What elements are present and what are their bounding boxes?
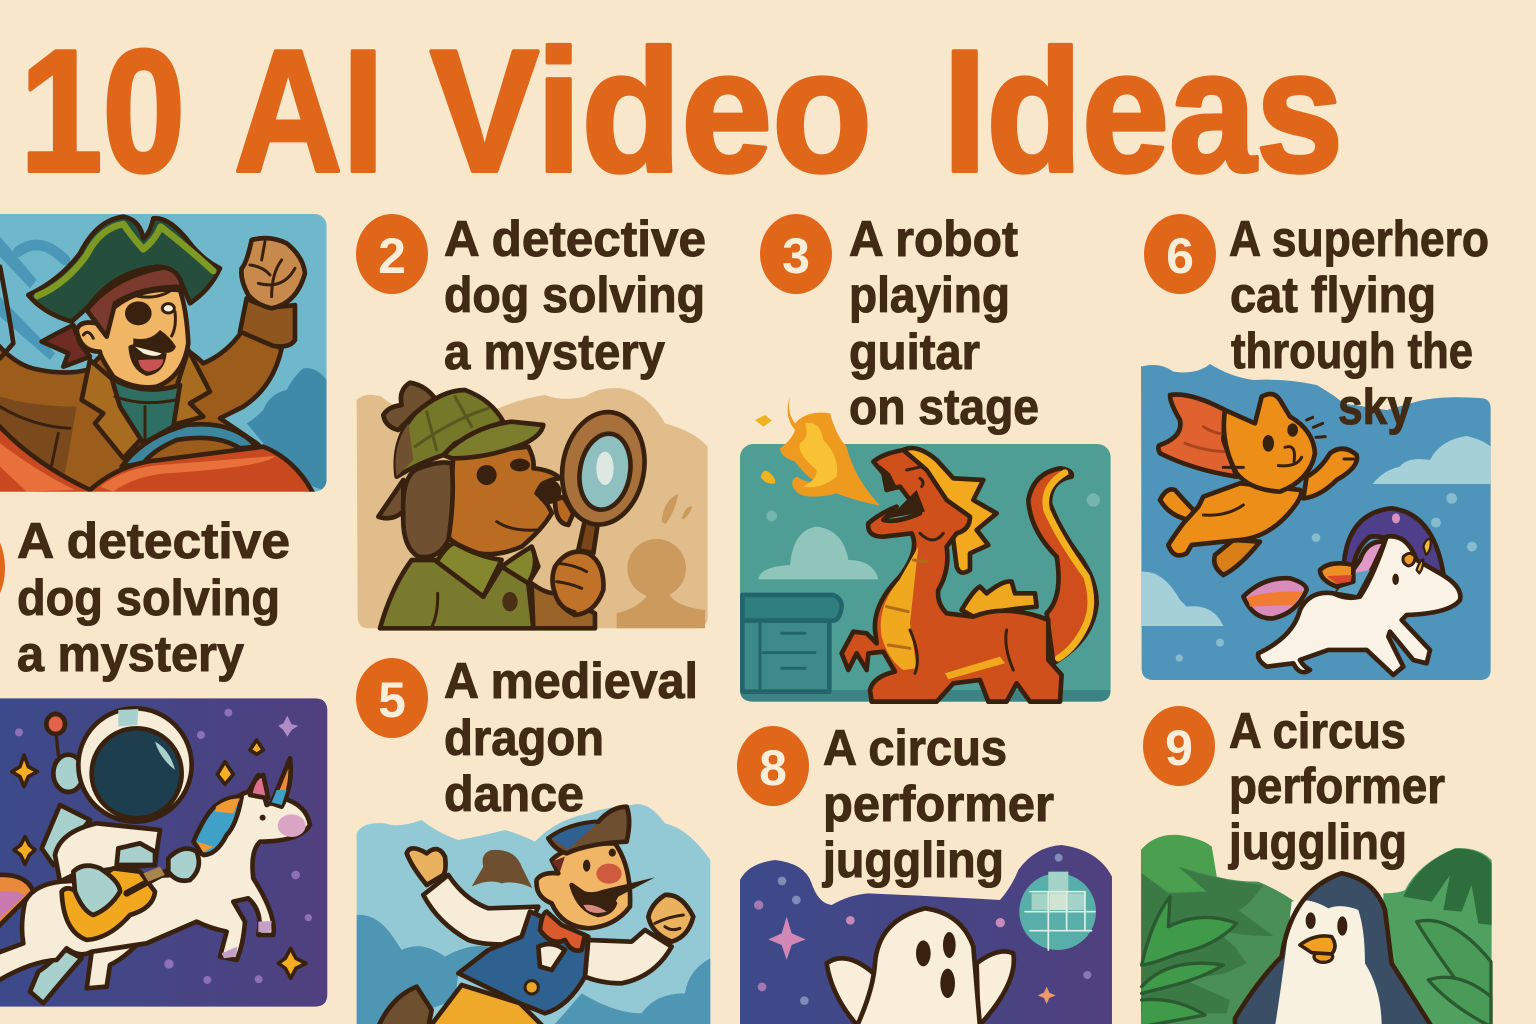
icon: red car — [0, 423, 315, 497]
panel: astronaut on unicorn — [0, 698, 327, 1007]
icon: dragon body — [842, 450, 1062, 702]
card heading: idea 5: 5 — [378, 672, 406, 728]
icon: pirate hair — [42, 325, 90, 367]
icon: steering wheel — [122, 424, 257, 467]
icon: desk — [742, 620, 829, 692]
title: AI — [234, 13, 384, 208]
card heading: idea 3: A robot — [849, 211, 1018, 267]
icon: back spikes — [962, 581, 1037, 617]
icon: shoe and trousers — [378, 987, 432, 1024]
card heading: idea 8: A circus — [823, 720, 1007, 776]
icon: deerstalker hat — [383, 383, 435, 430]
card heading: idea 8: performer — [823, 776, 1054, 832]
title: Ideas — [943, 13, 1343, 208]
icon: unicorn mane — [193, 797, 242, 855]
panel: ghost — [740, 845, 1112, 1024]
icon: man head — [536, 843, 630, 928]
card heading: idea 5: A medieval — [444, 653, 698, 709]
card heading: detective dog (left): dog solving — [17, 570, 280, 626]
card heading: detective dog (left): a mystery — [17, 626, 244, 682]
icon: dragon tail — [1028, 468, 1097, 663]
card heading: idea 2 — [356, 211, 706, 380]
icon: red cape — [1158, 394, 1237, 477]
panel: detective dog — [357, 383, 708, 628]
card heading: idea 3: playing — [849, 267, 1010, 323]
icon: unicorn body — [0, 775, 310, 982]
card heading: idea 9: 9 — [1165, 720, 1193, 776]
card heading: idea 9: A circus — [1229, 703, 1406, 759]
card heading: idea 6 — [1144, 211, 1489, 435]
card heading: idea 3 — [760, 211, 1039, 435]
icon: disco ball — [1019, 872, 1096, 950]
card heading: idea 2: a mystery — [444, 324, 665, 380]
icon: left arm and hand — [423, 875, 538, 944]
icon: bow tie — [540, 912, 585, 951]
card heading: idea 9: performer — [1229, 758, 1445, 814]
card heading: idea 9: juggling — [1228, 814, 1407, 870]
card heading: detective dog (left): A detective — [17, 513, 290, 569]
card heading: idea 2: dog solving — [444, 267, 705, 323]
icon: open mouth — [128, 344, 167, 376]
icon: pirate hat — [28, 217, 220, 322]
title: Video — [430, 13, 872, 208]
icon: right arm and fist — [585, 930, 672, 983]
icon: jungle leaves — [1142, 897, 1237, 965]
panel: dragon — [740, 397, 1111, 702]
title: 10 — [20, 13, 185, 208]
icon: floating hair piece — [472, 850, 532, 888]
card heading: idea 2: A detective — [444, 211, 706, 267]
card heading: idea 5: dragon — [444, 710, 604, 766]
icon: magnifying glass — [578, 520, 598, 553]
icon: dragon mane — [903, 448, 997, 573]
card heading: idea 8: 8 — [759, 740, 787, 796]
card heading: idea 9 — [1143, 703, 1445, 870]
icon: penguin — [1235, 873, 1432, 1024]
title — [20, 13, 1343, 208]
card heading: idea 3: on stage — [849, 379, 1039, 435]
card heading: idea 6: A superhero — [1229, 211, 1489, 267]
card heading: idea 5 — [356, 653, 698, 822]
card heading: idea 5: dance — [444, 766, 584, 822]
icon: orange cat — [1160, 489, 1200, 520]
icon: gold stars — [12, 740, 306, 978]
icon: unicorn ear and horn — [250, 775, 268, 798]
icon: flame — [780, 397, 880, 506]
icon: unicorn tail — [0, 875, 33, 928]
card heading: idea 8 — [737, 720, 1054, 888]
icon: astronaut — [42, 805, 90, 865]
icon: white unicorn — [1337, 542, 1385, 597]
icon: dog head — [555, 497, 573, 525]
icon: dog paw — [552, 552, 603, 615]
card heading: idea 6: through the — [1231, 323, 1473, 379]
card heading: idea 3: 3 — [782, 228, 810, 284]
card heading: idea 2: 2 — [378, 228, 406, 284]
icon: raised fist — [240, 298, 295, 346]
card heading: idea 6: cat flying — [1230, 267, 1436, 323]
icon: eye patch and eye — [125, 301, 152, 325]
icon: blue vest — [458, 912, 588, 1013]
icon: dog ears — [378, 480, 403, 518]
icon: pirate coat — [0, 332, 317, 497]
icon: dog coat — [380, 547, 538, 628]
card heading: idea 6: 6 — [1166, 228, 1194, 284]
number badge 1 — [0, 530, 5, 606]
card heading: idea 8: juggling — [822, 832, 1004, 888]
card heading: detective dog (left) — [17, 513, 290, 682]
card heading: idea 3: guitar — [849, 324, 980, 380]
card heading: idea 6: sky — [1338, 379, 1412, 435]
icon: rainbow arc — [1343, 508, 1443, 577]
panel: superhero cat and unicorn — [1141, 364, 1491, 680]
icon: hind legs — [30, 948, 82, 1003]
panel: penguin in jungle — [1141, 835, 1492, 1024]
panel: pirate driving a car — [0, 214, 327, 497]
icon: pirate head — [77, 290, 188, 387]
panel: man dancing — [357, 804, 710, 1024]
icon: white ghost — [827, 958, 882, 1024]
